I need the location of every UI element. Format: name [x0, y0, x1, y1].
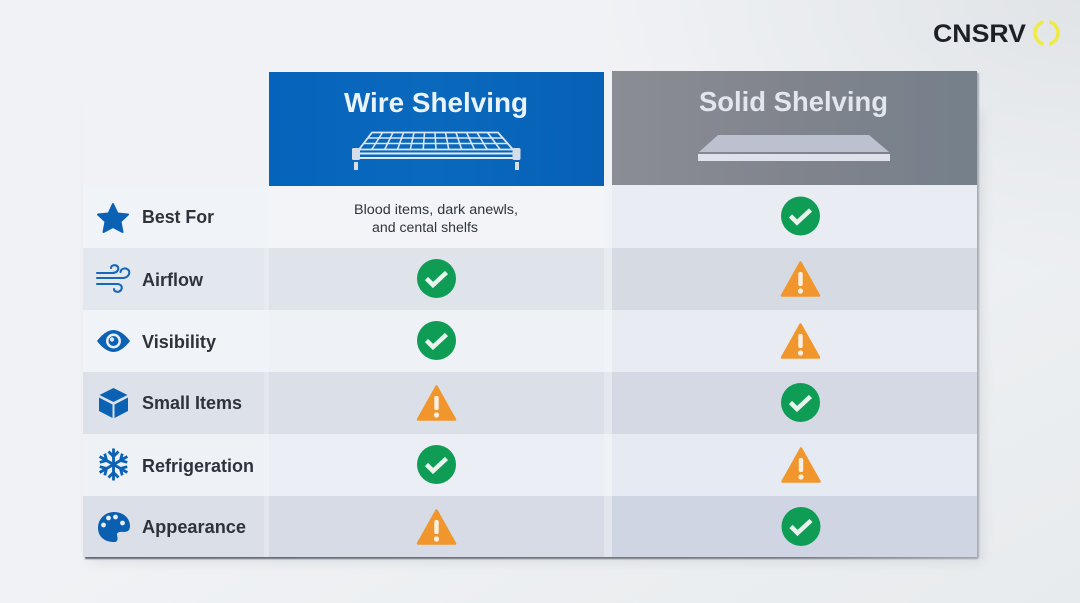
- text: wire shelving best for: Blood items, dark anewls,: [354, 202, 518, 217]
- icon: check, wire airflow: [417, 259, 456, 298]
- icon: warning, wire small items: [418, 386, 455, 420]
- label: Airflow: Airflow: [142, 270, 204, 290]
- icon: check, wire refrigeration: [417, 445, 456, 484]
- logo: CNSRV: [933, 20, 1058, 48]
- row: Refrigeration: [83, 434, 977, 496]
- icon: solid shelf: [698, 135, 890, 161]
- row: Airflow: [83, 248, 977, 310]
- header: Solid Shelving: [612, 71, 977, 185]
- icon: warning, wire appearance: [418, 510, 455, 544]
- label: Small Items: Small Items: [142, 393, 242, 413]
- label: Refrigeration: Refrigeration: [142, 456, 254, 476]
- icon: warning, solid airflow: [782, 262, 819, 296]
- row: Visibility: [83, 310, 977, 372]
- row: Appearance: [83, 496, 977, 557]
- icon: check, solid small items: [781, 383, 820, 422]
- icon: star: [98, 204, 128, 232]
- icon: check, solid best for: [781, 196, 820, 236]
- icon: eye: [97, 330, 130, 352]
- icon: check, wire visibility: [417, 321, 456, 360]
- icon: wind: [97, 265, 129, 292]
- header: Solid Shelving: Solid Shelving: [699, 86, 888, 117]
- row: Small Items: [83, 372, 977, 434]
- icon: warning, solid refrigeration: [782, 448, 820, 482]
- row: Best For: [98, 185, 977, 248]
- comparison table panel: [83, 71, 982, 562]
- label: Appearance: Appearance: [142, 517, 246, 537]
- icon: palette: [98, 512, 130, 542]
- label: Visibility: Visibility: [142, 332, 216, 352]
- icon: check, solid appearance: [782, 507, 820, 546]
- icon: warning, solid visibility: [782, 324, 819, 358]
- label: Best For: Best For: [142, 207, 214, 227]
- header: Wire Shelving: Wire Shelving: [344, 87, 528, 118]
- header: Wire Shelving: [269, 72, 604, 186]
- icon: cube: [99, 388, 128, 418]
- text: wire shelving best for: and cental shelfs: [372, 220, 478, 235]
- icon: snowflake: [97, 448, 130, 480]
- logo: CNSRV: CNSRV: [933, 20, 1026, 48]
- text: wire shelving best for: [354, 202, 518, 235]
- icon: wire shelf: [352, 132, 520, 170]
